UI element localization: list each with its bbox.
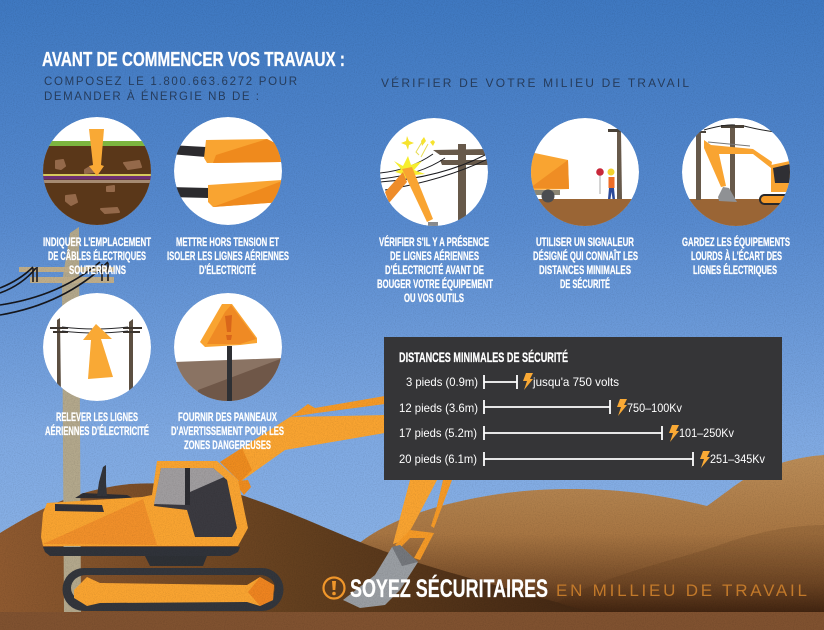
- caption: mettre hors tension: D'ÉLECTRICITÉ: [199, 262, 256, 277]
- caption: indiquer l'emplacement: [43, 235, 151, 277]
- caption: utiliser un signaleur: [533, 235, 638, 291]
- heading: avant de commencer: AVANT DE COMMENCER VOS TRAVAUX :: [42, 49, 345, 71]
- caption: relever les lignes: RELEVER LES LIGNES: [56, 410, 138, 424]
- row: 12 pieds: 750–100Kv: [627, 401, 682, 415]
- subheading: composez le numéro: [44, 76, 297, 103]
- icon: sparks on power line: [380, 118, 490, 234]
- foreground ground strip: [0, 612, 824, 630]
- stick lower arm: [393, 480, 437, 544]
- panel title: DISTANCES MINIMALES DE SÉCURITÉ: [399, 350, 568, 365]
- excavator body: [41, 461, 248, 546]
- slogan: en milieu de travail: EN MILLIEU DE TRAVAIL: [556, 581, 807, 600]
- icon: insulated lines: [170, 117, 282, 225]
- caption: mettre hors tension: ISOLER LES LIGNES AÉRIENNES: [167, 248, 289, 263]
- window glass: [154, 468, 224, 505]
- row: 17 pieds: 17 pieds (5.2m): [399, 426, 477, 440]
- row: 12 pieds: 12 pieds (3.6m): [399, 401, 478, 415]
- row: 3 pieds: [406, 373, 619, 390]
- undercarriage: [43, 547, 240, 556]
- row: 3 pieds: jusqu'a 750 volts: [532, 375, 619, 389]
- caption: vérifier présence de lignes: DE LIGNES AÉRIENNES: [390, 248, 479, 263]
- exhaust pipe: [97, 465, 107, 496]
- caption: fournir des panneaux: [171, 410, 284, 452]
- excavator boom: [220, 415, 385, 482]
- icon: warning sign: [174, 293, 283, 405]
- caption: indiquer l'emplacement: SOUTERRAINS: [69, 263, 126, 277]
- body facet: [43, 499, 157, 545]
- icon: raise power lines: [43, 293, 151, 401]
- caption: vérifier présence de lignes: VÉRIFIER S'IL Y A PRÉSENCE: [379, 234, 489, 249]
- caption: vérifier présence de lignes: [377, 234, 493, 305]
- caption: mettre hors tension: [167, 235, 289, 277]
- panel: distances minimales de sécurité: [384, 337, 782, 480]
- caption: gardez les équipements: LIGNES ÉLECTRIQUES: [693, 262, 777, 277]
- excavator tracks: [62, 568, 284, 611]
- excavator joint: [237, 480, 251, 495]
- excavator hydraulic arm: [290, 396, 385, 417]
- vent: [55, 504, 104, 512]
- icon: underground cables: [40, 117, 154, 226]
- caption: utiliser un signaleur: UTILISER UN SIGNALEUR: [536, 235, 634, 249]
- icon: exclamation circle: [324, 578, 344, 598]
- caption: relever les lignes: [45, 410, 149, 438]
- caption: fournir des panneaux: FOURNIR DES PANNEAUX: [178, 410, 277, 424]
- caption: fournir des panneaux: ZONES DANGEREUSES: [184, 438, 271, 452]
- caption: mettre hors tension: METTRE HORS TENSION ET: [176, 235, 279, 249]
- subheading: composez le numéro: DEMANDER À ÉNERGIE NB DE :: [44, 90, 259, 103]
- slogan: soyez sécuritaires: SOYEZ SÉCURITAIRES: [350, 574, 548, 603]
- icon: signaller and truck: [531, 118, 639, 226]
- caption: gardez les équipements: [682, 234, 790, 277]
- row: 20 pieds: 20 pieds (6.1m): [399, 452, 477, 466]
- turret base: [145, 556, 207, 566]
- bucket linkage: [395, 530, 434, 560]
- caption: vérifier présence de lignes: D'ÉLECTRICITÉ AVANT DE: [385, 262, 484, 277]
- heading: vérifier le milieu de travail: VÉRIFIER DE VOTRE MILIEU DE TRAVAIL: [381, 75, 689, 90]
- row: 3 pieds: 3 pieds (0.9m): [406, 375, 478, 389]
- row: 20 pieds: [399, 451, 765, 468]
- caption: indiquer l'emplacement: DE CÂBLES ÉLECTRIQUES: [48, 248, 146, 263]
- excavator: [41, 396, 452, 611]
- caption: utiliser un signaleur: DÉSIGNÉ QUI CONNAÎT LES: [533, 248, 638, 263]
- row: 20 pieds: 251–345Kv: [710, 452, 765, 466]
- engine hood: [75, 493, 135, 499]
- caption: indiquer l'emplacement: INDIQUER L'EMPLACEMENT: [43, 235, 151, 249]
- row: 12 pieds: [399, 399, 682, 416]
- icon: excavator clear of lines: [680, 118, 793, 229]
- excavator boom shadow: [220, 448, 252, 482]
- caption: vérifier présence de lignes: OU VOS OUTILS: [404, 291, 464, 305]
- track roller facet: [248, 577, 274, 606]
- caption: fournir des panneaux: D'AVERTISSEMENT POUR LES: [171, 424, 284, 438]
- background hills: [0, 455, 824, 612]
- utility pole with wires: [0, 227, 114, 612]
- row: 17 pieds: 101–250Kv: [679, 426, 734, 440]
- caption: relever les lignes: AÉRIENNES D'ÉLECTRICITÉ: [45, 423, 149, 438]
- track rollers: [74, 577, 274, 606]
- stick piston: [431, 480, 452, 528]
- bucket shade: [392, 545, 418, 566]
- bucket: [343, 545, 418, 608]
- window pillar: [185, 468, 190, 505]
- caption: utiliser un signaleur: DISTANCES MINIMALES: [539, 263, 631, 277]
- caption: vérifier présence de lignes: BOUGER VOTRE ÉQUIPEMENT: [377, 276, 493, 291]
- row: 17 pieds: [399, 425, 734, 442]
- caption: utiliser un signaleur: DE SÉCURITÉ: [560, 276, 610, 291]
- subheading: composez le numéro: COMPOSEZ LE 1.800.663.6272 POUR: [44, 76, 297, 88]
- cab window: [154, 468, 237, 537]
